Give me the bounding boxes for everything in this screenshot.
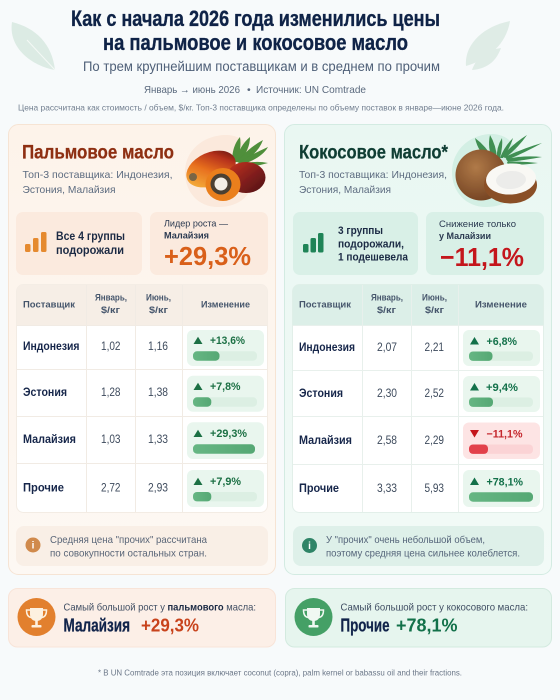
leader label: [164, 219, 228, 242]
icon: info: i: [32, 540, 35, 552]
coconut winner label: Самый большой рост у кокосового масла:: [340, 602, 528, 614]
icon: info: [26, 538, 40, 552]
coconut table header: Июнь,: [422, 293, 447, 303]
coconut note text: поэтому средняя цена сильнее колеблется.: [326, 548, 520, 560]
stat: only decline: [426, 212, 544, 275]
coconut row: Индонезия: Индонезия: [299, 342, 355, 354]
decline label: у Малайзии: [439, 231, 491, 242]
coconut heading: Кокосовое масло*: [299, 142, 448, 164]
palm row: Прочие: 2,72: [101, 483, 120, 495]
palm row: Индонезия: 1,16: [148, 341, 168, 353]
coconut table header: $/кг: [377, 305, 396, 316]
decline label: Снижение только: [439, 219, 516, 230]
icon: palm fruit: [181, 135, 268, 207]
decorative leaves right: [466, 21, 510, 70]
coconut table header: [299, 293, 527, 316]
palm table: [16, 284, 268, 512]
methodology note: Цена рассчитана как стоимость / объем, $/кг. Топ-3 поставщика определены по объему поставок в январе—июне 2026 года.: [18, 102, 504, 112]
palm table header: Поставщик: [23, 300, 75, 311]
coconut suppliers text: [299, 169, 447, 196]
coconut table header: Январь,: [371, 293, 403, 303]
coconut row: Малайзия: [299, 422, 540, 459]
leader label: Малайзия: [164, 230, 209, 242]
palm row: Эстония: 1,38: [148, 387, 168, 399]
coconut row: Малайзия: 2,29: [424, 435, 444, 447]
palm note: [16, 526, 268, 566]
coconut row: Индонезия: [299, 330, 540, 366]
icon: coconut: [452, 134, 542, 207]
coconut winner name: Прочие: [340, 615, 390, 636]
palm suppliers text: Топ-3 поставщика: Индонезия,: [22, 169, 172, 181]
period and source: Источник: UN Comtrade: [256, 84, 366, 96]
palm note text: [50, 534, 207, 560]
icon: trophy: [18, 598, 56, 636]
stat text: [56, 231, 125, 257]
coconut row: Малайзия: 2,58: [377, 435, 397, 447]
decorative leaf left: [12, 22, 55, 70]
palm table header: Январь,: [95, 293, 127, 303]
palm row: Малайзия: 1,03: [101, 434, 120, 446]
palm row: Малайзия: 1,33: [148, 434, 168, 446]
palm row: Индонезия: +13,6%: [210, 335, 245, 347]
leader value: +29,3%: [164, 241, 251, 271]
palm note text: Средняя цена "прочих" рассчитана: [50, 534, 207, 546]
callout: coconut winner: [286, 588, 552, 647]
stat text: [338, 225, 409, 264]
coconut row: Эстония: [299, 376, 540, 412]
icon: bars: [303, 233, 324, 252]
period and source: •: [247, 84, 251, 96]
footnote: * В UN Comtrade эта позиция включает coconut (copra), palm kernel or babassu oil and their fractions.: [98, 668, 462, 678]
coconut row: Малайзия: −11,1%: [486, 428, 523, 440]
coconut row: Прочие: 3,33: [377, 483, 397, 495]
palm row: Индонезия: 1,02: [101, 341, 120, 353]
palm note text: по совокупности остальных стран.: [50, 548, 207, 560]
coconut note: [293, 526, 544, 566]
decline label: [439, 219, 516, 242]
coconut table: [292, 284, 544, 512]
palm row: Малайзия: +29,3%: [210, 428, 247, 440]
palm row: Малайзия: [23, 422, 264, 459]
stat text: подорожали: [56, 245, 124, 257]
coconut row: Индонезия: 2,21: [424, 342, 444, 354]
panel: coconut oil: [284, 124, 552, 574]
coconut row: Индонезия: +6,8%: [486, 336, 517, 348]
palm row: Индонезия: Индонезия: [23, 341, 80, 353]
title: [71, 6, 440, 55]
panel: palm oil: [8, 124, 276, 574]
title: Как с начала 2026 года изменились цены: [71, 6, 440, 31]
coconut suppliers text: Эстония, Малайзия: [299, 184, 391, 196]
palm winner name: Малайзия: [64, 615, 130, 636]
palm table header: Изменение: [201, 300, 250, 311]
coconut row: Эстония: +9,4%: [486, 382, 518, 394]
palm row: Индонезия: [23, 330, 264, 366]
coconut note text: [326, 534, 520, 560]
palm table header: $/кг: [101, 305, 120, 316]
callout: palm winner: [8, 588, 276, 647]
palm table header: Июнь,: [146, 293, 171, 303]
stat: all groups rose: [16, 212, 142, 275]
palm row: Малайзия: Малайзия: [23, 434, 76, 446]
coconut table header: $/кг: [425, 305, 444, 316]
coconut table header: Изменение: [475, 300, 527, 311]
palm row: Эстония: 1,28: [101, 387, 120, 399]
palm row: Прочие: 2,93: [148, 483, 168, 495]
coconut row: Эстония: Эстония: [299, 388, 343, 400]
stat: growth leader: [150, 212, 268, 275]
palm winner label: Самый большой рост у пальмового масла:: [64, 602, 256, 614]
coconut row: Эстония: 2,52: [424, 388, 444, 400]
subtitle: По трем крупнейшим поставщикам и в среднем по прочим: [83, 59, 440, 74]
icon: bars: [25, 232, 46, 252]
coconut suppliers text: Топ-3 поставщика: Индонезия,: [299, 169, 447, 181]
palm row: Прочие: Прочие: [23, 483, 64, 495]
coconut note text: У "прочих" очень небольшой объем,: [326, 534, 485, 546]
coconut row: Прочие: 5,93: [424, 483, 444, 495]
palm row: Эстония: +7,8%: [210, 381, 241, 393]
coconut row: Эстония: 2,30: [377, 388, 397, 400]
stat text: 1 подешевела: [338, 252, 409, 264]
palm row: Эстония: Эстония: [23, 387, 67, 399]
period and source: Январь → июнь 2026: [144, 84, 240, 96]
period and source: [144, 84, 366, 96]
coconut row: Прочие: Прочие: [299, 483, 339, 495]
palm table header: [23, 293, 250, 316]
stat text: Все 4 группы: [56, 231, 125, 243]
palm suppliers text: [22, 169, 172, 196]
coconut winner value: +78,1%: [396, 615, 458, 636]
palm row: Эстония: [23, 376, 264, 412]
palm suppliers text: Эстония, Малайзия: [22, 184, 116, 196]
icon: info: [302, 538, 317, 553]
coconut row: Прочие: +78,1%: [486, 476, 523, 488]
stat: three groups rose: [293, 212, 418, 275]
palm row: Прочие: [23, 470, 264, 507]
coconut row: Малайзия: Малайзия: [299, 435, 352, 447]
palm row: Прочие: +7,9%: [210, 476, 241, 488]
decline value: −11,1%: [440, 242, 524, 272]
title: на пальмовое и кокосовое масло: [103, 30, 408, 55]
icon: info: i: [308, 541, 311, 552]
leader label: Лидер роста —: [164, 219, 228, 230]
palm table header: $/кг: [149, 305, 168, 316]
coconut table header: Поставщик: [299, 300, 351, 311]
coconut row: Прочие: [299, 470, 540, 507]
coconut row: Индонезия: 2,07: [377, 342, 397, 354]
stat text: подорожали,: [338, 238, 404, 250]
icon: trophy: [294, 598, 332, 636]
stat text: 3 группы: [338, 225, 383, 237]
palm heading: Пальмовое масло: [22, 142, 174, 164]
palm winner value: +29,3%: [141, 615, 199, 636]
